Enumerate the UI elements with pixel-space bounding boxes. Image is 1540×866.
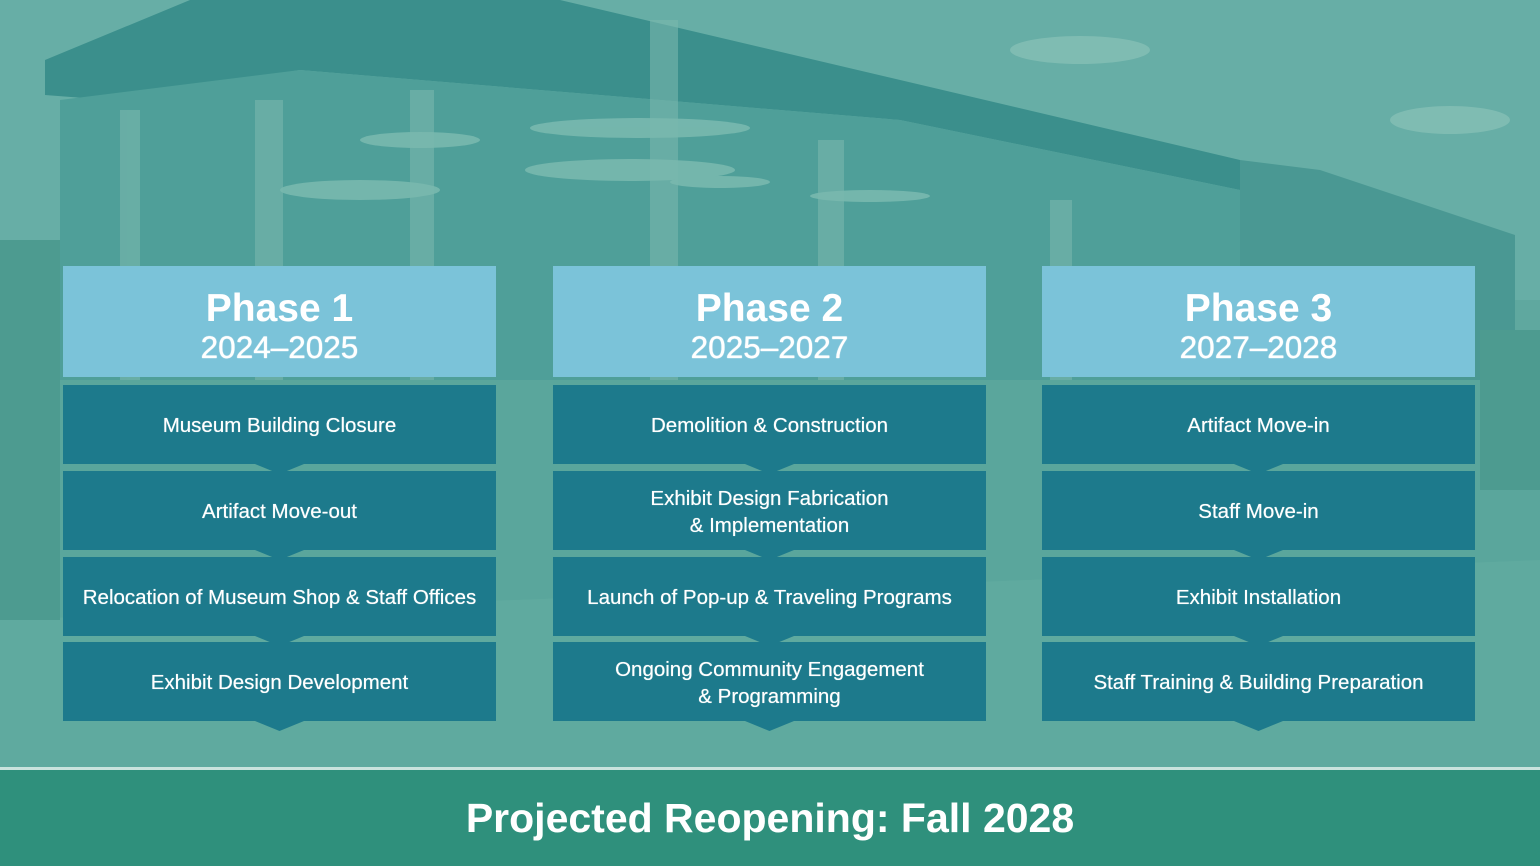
step: Staff Move-in: Staff Move-in [1198,500,1319,523]
footer: projected reopening: Projected Reopening: Fall 2028 [466,795,1074,841]
column: Phase 2 [553,266,986,731]
header: Phase 2: Phase 2 [696,287,843,330]
step: Community engagement [553,642,986,731]
header: Phase 3: Phase 3 [1185,287,1332,330]
step: Museum Building Closure: Museum Building Closure [163,414,396,437]
step: Museum Building Closure [63,385,496,474]
header: Phase 1: 2024–2025 [201,329,358,365]
step: Staff Training: Staff Training & Building Preparation [1093,671,1424,694]
step: Relocation [63,557,496,646]
step: Exhibit Installation [1042,557,1475,646]
header: Phase 2: 2025–2027 [691,329,848,365]
header: Phase 3: 2027–2028 [1180,329,1337,365]
column: Phase 1 [63,266,496,731]
step: Artifact Move-out [63,471,496,560]
header: Phase 1 [63,266,496,377]
step: Exhibit Fabrication: Exhibit Design Fabrication [650,486,889,510]
footer: projected reopening [0,770,1540,866]
step: Pop-up programs [553,557,986,646]
step: Staff Move-in [1042,471,1475,560]
step: Pop-up programs: Launch of Pop-up & Traveling Programs [587,586,952,609]
column: Phase 3 [1042,266,1475,731]
header: Phase 1: Phase 1 [206,287,353,330]
step: Artifact Move-out: Artifact Move-out [202,500,357,523]
step: Artifact Move-in [1042,385,1475,474]
step: Exhibit Design Development: Exhibit Design Development [151,671,408,694]
step: Staff Training [1042,642,1475,731]
step: Exhibit Fabrication: & Implementation [690,514,849,536]
step: Exhibit Fabrication [553,471,986,560]
header: Phase 3 [1042,266,1475,377]
step: Demolition: Demolition & Construction [651,414,888,437]
step: Exhibit Installation: Exhibit Installation [1176,586,1341,609]
step: Exhibit Design Development [63,642,496,731]
step: Community engagement: & Programming [698,684,841,708]
step: Community engagement: Ongoing Community Engagement [615,658,924,680]
step: Artifact Move-in: Artifact Move-in [1187,414,1330,437]
header: Phase 2 [553,266,986,377]
step: Relocation: Relocation of Museum Shop & Staff Offices [83,586,476,609]
step: Demolition [553,385,986,474]
